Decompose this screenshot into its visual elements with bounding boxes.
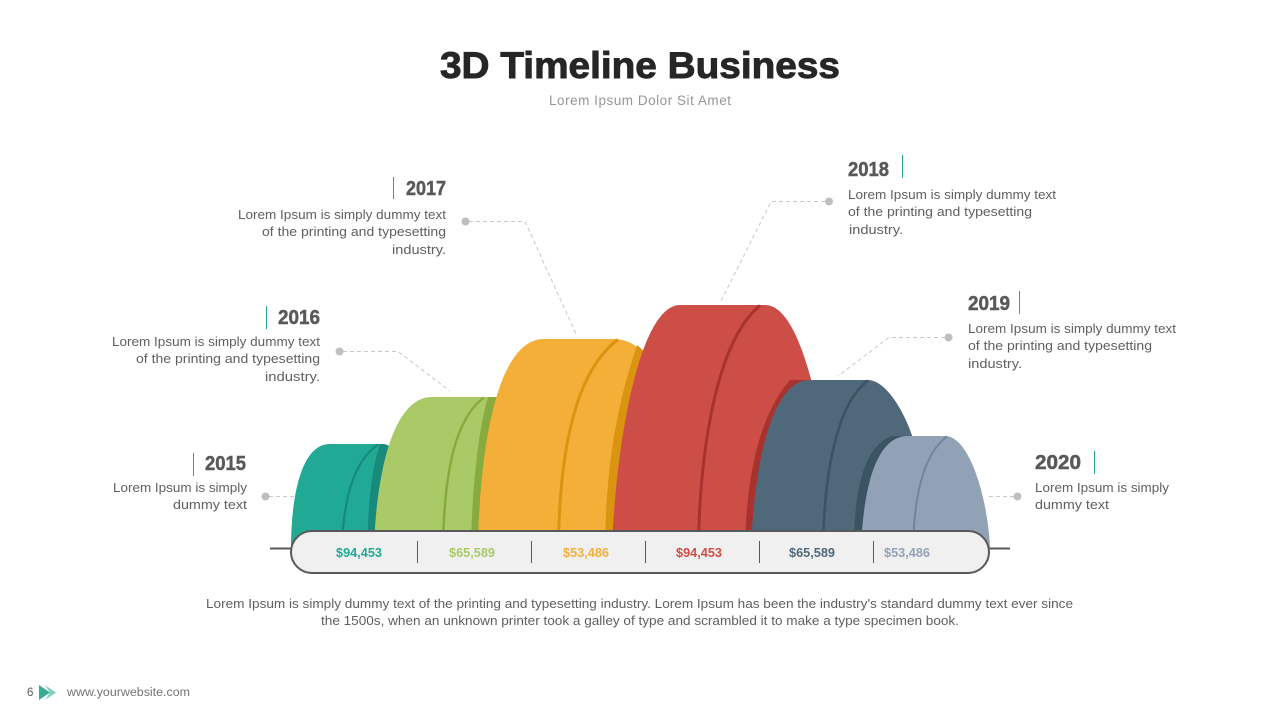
- band: 2016 green: [374, 397, 520, 548]
- callout: 2017: industry.: [392, 242, 446, 257]
- icon: double arrow: [39, 685, 56, 700]
- band: 2018 red: [612, 305, 830, 548]
- callout: 2015: [113, 453, 295, 512]
- value 2020: $53,486: [884, 545, 930, 560]
- callout: 2018: Lorem Ipsum is simply dummy text: [848, 187, 1056, 202]
- callout: 2020: dummy text: [1035, 497, 1109, 512]
- callout: 2015: Lorem Ipsum is simply: [113, 480, 248, 495]
- callout: 2017: 2017: [406, 178, 446, 200]
- callout: 2016: Lorem Ipsum is simply dummy text: [112, 334, 320, 349]
- callout: 2019: industry.: [968, 356, 1022, 371]
- callout: 2020: 2020: [1035, 452, 1081, 474]
- value bar: [291, 531, 989, 573]
- callout: 2017: of the printing and typesetting: [262, 224, 446, 239]
- band: 2015 teal: [291, 444, 400, 548]
- callout: 2016: industry.: [265, 369, 320, 384]
- callout: 2018: 2018: [848, 159, 889, 181]
- callout: 2016: 2016: [278, 307, 320, 329]
- callout: 2019: [838, 291, 1176, 376]
- callout: 2017: Lorem Ipsum is simply dummy text: [238, 207, 446, 222]
- callout: 2016: of the printing and typesetting: [136, 351, 320, 366]
- callout: 2020: [988, 451, 1170, 512]
- value 2016: $65,589: [449, 545, 495, 560]
- axis line: [270, 548, 1010, 550]
- callout: 2018: industry.: [849, 222, 903, 237]
- callout: 2015: dummy text: [173, 497, 247, 512]
- 3D timeline chart: [270, 305, 1010, 573]
- page number: 6: [27, 687, 33, 699]
- band: 2017 orange: [478, 339, 660, 548]
- band: 2019 slate: [751, 380, 930, 548]
- title: 3D Timeline Business: [440, 45, 840, 86]
- band: 2020 light slate: [861, 436, 990, 548]
- callout: 2019: Lorem Ipsum is simply dummy text: [968, 321, 1176, 336]
- description text: Lorem Ipsum is simply dummy text of the printing and typesetting industry. Lorem Ipsum has been the industry's standard dummy text ever since: [206, 596, 1073, 611]
- value 2017: $53,486: [563, 545, 609, 560]
- callout: 2017: [238, 177, 577, 336]
- callout: 2018: of the printing and typesetting: [848, 204, 1032, 219]
- value 2015: $94,453: [336, 545, 382, 560]
- subtitle: Lorem Ipsum Dolor Sit Amet: [549, 93, 731, 108]
- callout: 2015: 2015: [205, 453, 246, 475]
- description text: [206, 596, 1073, 628]
- value 2019: $65,589: [789, 545, 835, 560]
- description text: the 1500s, when an unknown printer took a galley of type and scrambled it to make a type specimen book.: [321, 613, 959, 628]
- value 2018: $94,453: [676, 545, 722, 560]
- website: www.yourwebsite.com: [66, 687, 190, 699]
- callout: 2018: [720, 155, 1056, 303]
- callout: 2020: Lorem Ipsum is simply: [1035, 480, 1170, 495]
- callout: 2019: of the printing and typesetting: [968, 338, 1152, 353]
- callout: 2016: [112, 306, 450, 391]
- callout: 2019: 2019: [968, 293, 1010, 315]
- footer: [27, 685, 190, 700]
